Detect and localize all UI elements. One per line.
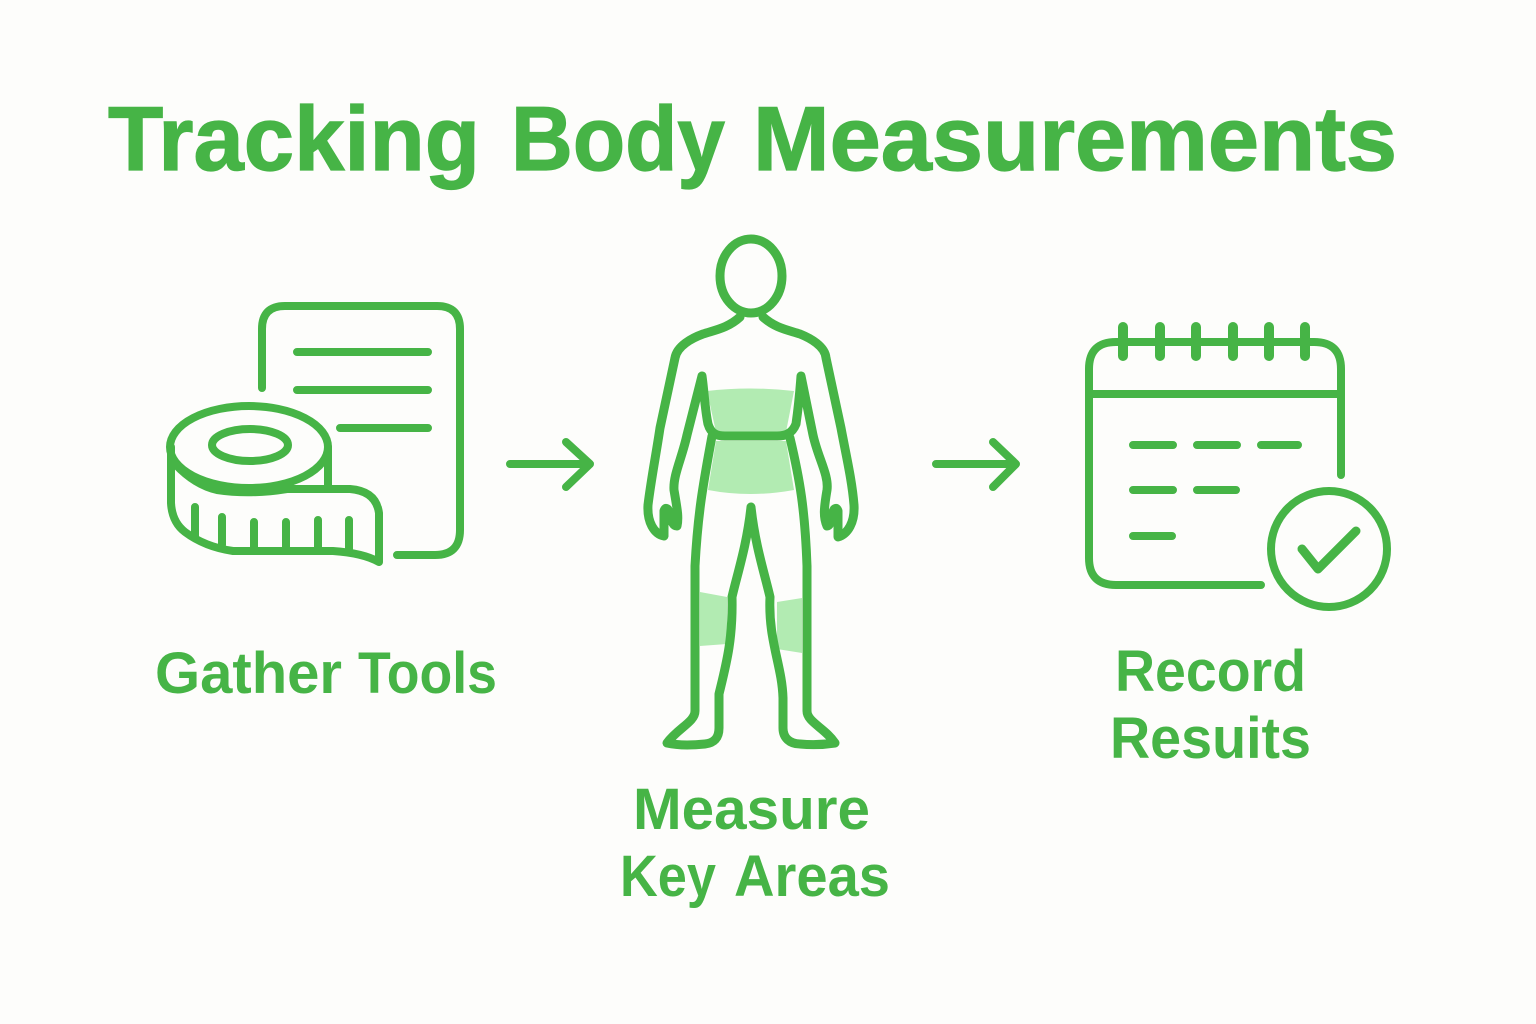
document outline bbox=[262, 306, 460, 555]
tape measure top face bbox=[170, 406, 328, 488]
label: measure key areas: Measure bbox=[633, 777, 870, 842]
calendar rings bbox=[1123, 327, 1305, 356]
title: Body bbox=[511, 89, 725, 190]
tape measure hub bbox=[212, 429, 288, 461]
calendar entries bbox=[1133, 445, 1298, 536]
title: Tracking bbox=[108, 89, 480, 190]
measurement bands bbox=[700, 388, 802, 653]
tape ticks bbox=[195, 507, 349, 549]
icon: tape measure and document bbox=[170, 306, 460, 562]
label: record results: Resuits bbox=[1110, 706, 1311, 771]
label: record results bbox=[1110, 639, 1311, 771]
tape measure body bbox=[171, 447, 379, 562]
check mark bbox=[1302, 531, 1356, 569]
label: record results: Record bbox=[1115, 639, 1306, 704]
body outline bbox=[648, 239, 854, 745]
label: measure key areas bbox=[620, 777, 890, 909]
document text lines bbox=[297, 352, 428, 428]
icon: calendar with check bbox=[1089, 327, 1387, 607]
label: measure key areas: Key bbox=[620, 844, 716, 909]
label: measure key areas: Areas bbox=[734, 844, 890, 909]
label: gather tools: Gather bbox=[155, 641, 342, 706]
calendar frame bbox=[1089, 342, 1341, 585]
arrow: tools to measure bbox=[510, 442, 590, 487]
check badge bbox=[1271, 491, 1387, 607]
arrow: measure to record bbox=[936, 442, 1016, 487]
icon: body figure with measurement bands bbox=[648, 239, 854, 745]
label: gather tools bbox=[155, 641, 497, 706]
title: Measurements bbox=[753, 89, 1397, 190]
title bbox=[108, 89, 1397, 190]
label: gather tools: Tools bbox=[358, 641, 497, 706]
